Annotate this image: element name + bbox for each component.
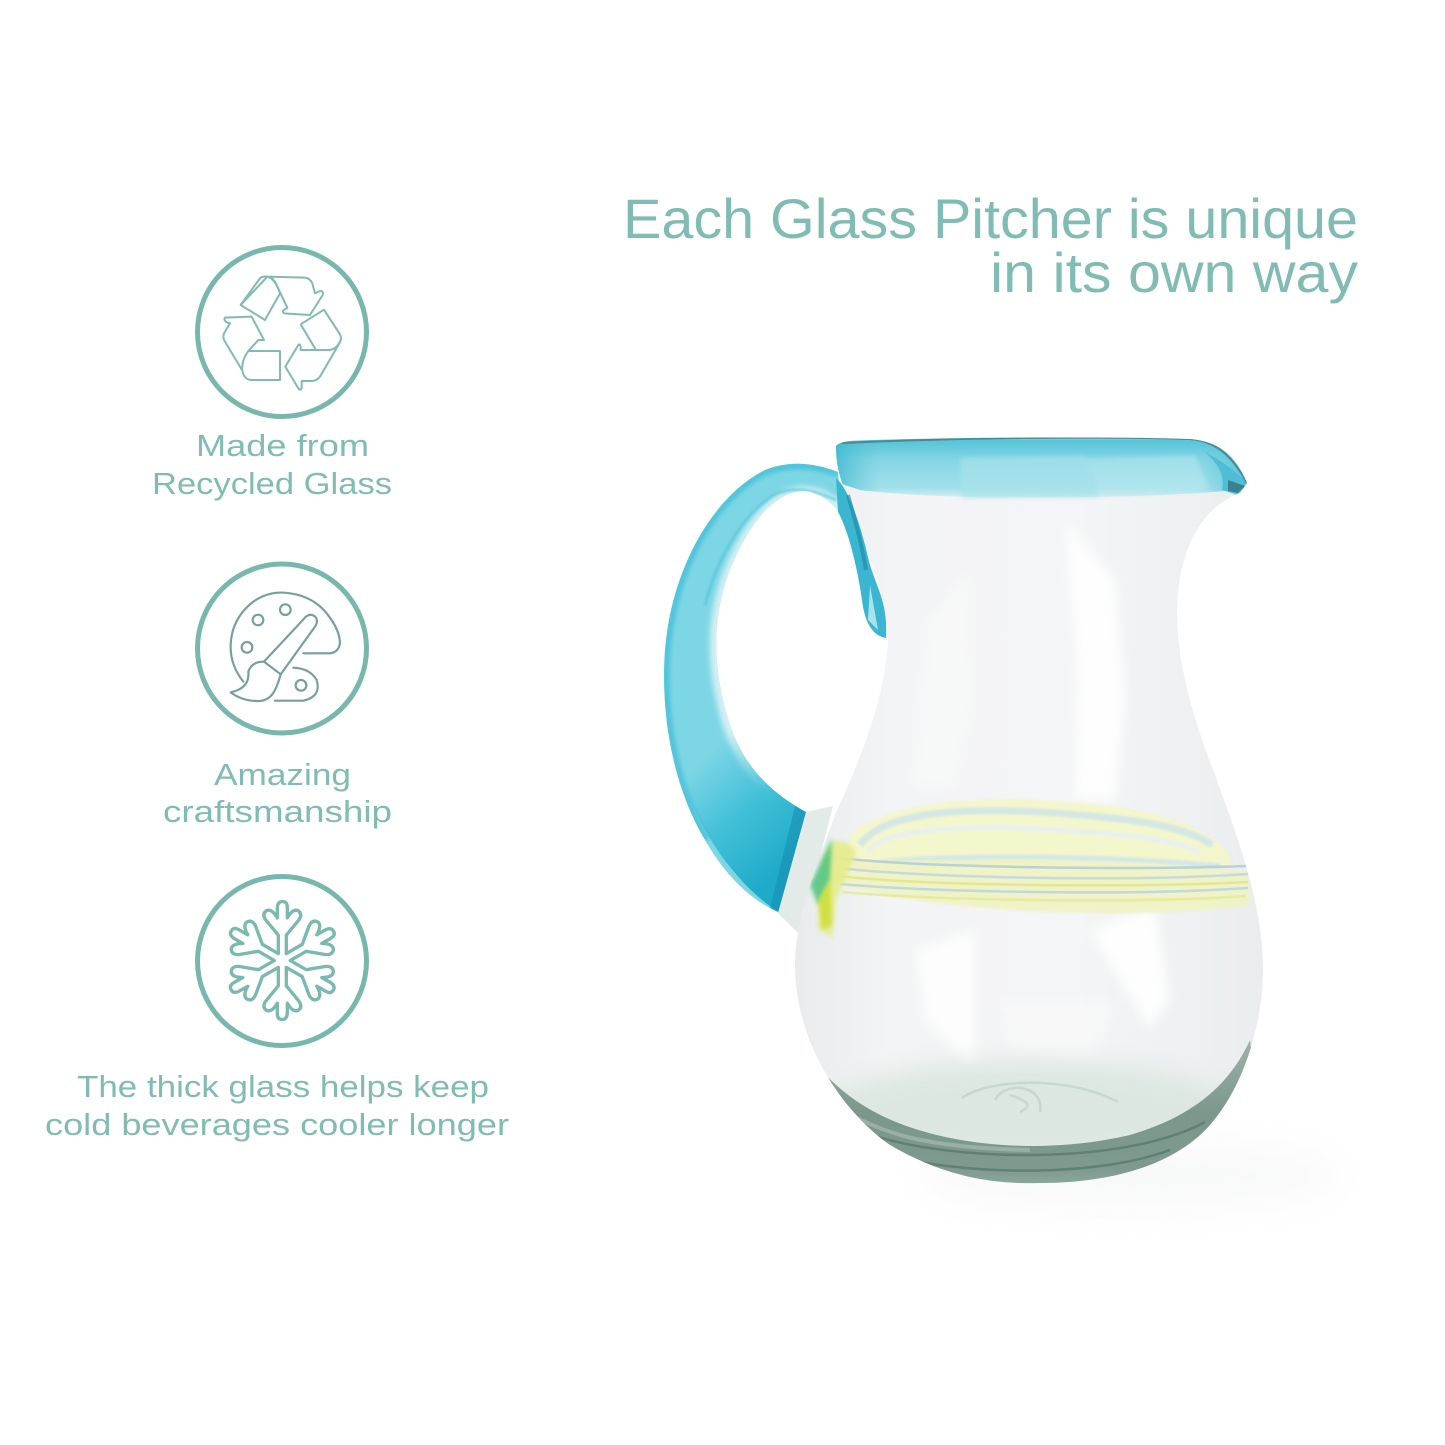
glass highlights: [924, 544, 1167, 1047]
label: amazing craftsmanship: [163, 757, 392, 829]
handle upper attachment: [836, 478, 886, 638]
turquoise rim: [836, 438, 1247, 498]
pitcher handle: [664, 464, 842, 935]
title: Each Glass Pitcher is unique: [623, 187, 1358, 250]
coloured band: [825, 800, 1250, 913]
pitcher body: [795, 438, 1263, 1183]
green swirl at handle join: [818, 841, 855, 938]
label: made from recycled glass: Made from: [196, 428, 369, 463]
icon: snowflake in circle: [198, 876, 366, 1046]
label: thick glass: cold beverages cooler longer: [45, 1107, 509, 1142]
panel: insulation: [45, 876, 509, 1142]
title: in its own way: [990, 241, 1358, 304]
label: made from recycled glass: Recycled Glass: [152, 466, 392, 501]
icon: palette and brush in circle: [198, 564, 366, 733]
panel: recycled glass: [152, 248, 392, 501]
label: amazing craftsmanship: craftsmanship: [163, 794, 392, 829]
shadow under pitcher: [920, 1141, 1340, 1209]
label: thick glass: [45, 1069, 509, 1142]
icon: recycling arrows in circle: [198, 248, 366, 416]
dark green base ring: [828, 1040, 1251, 1184]
base glass: [844, 1054, 1214, 1146]
label: thick glass: The thick glass helps keep: [77, 1069, 489, 1104]
base swirl: [962, 1083, 1118, 1112]
title: [623, 187, 1358, 304]
product photo: glass pitcher: [664, 438, 1263, 1184]
label: made from recycled glass: [152, 428, 392, 501]
label: amazing craftsmanship: Amazing: [214, 757, 351, 792]
panel: craftsmanship: [163, 564, 392, 829]
